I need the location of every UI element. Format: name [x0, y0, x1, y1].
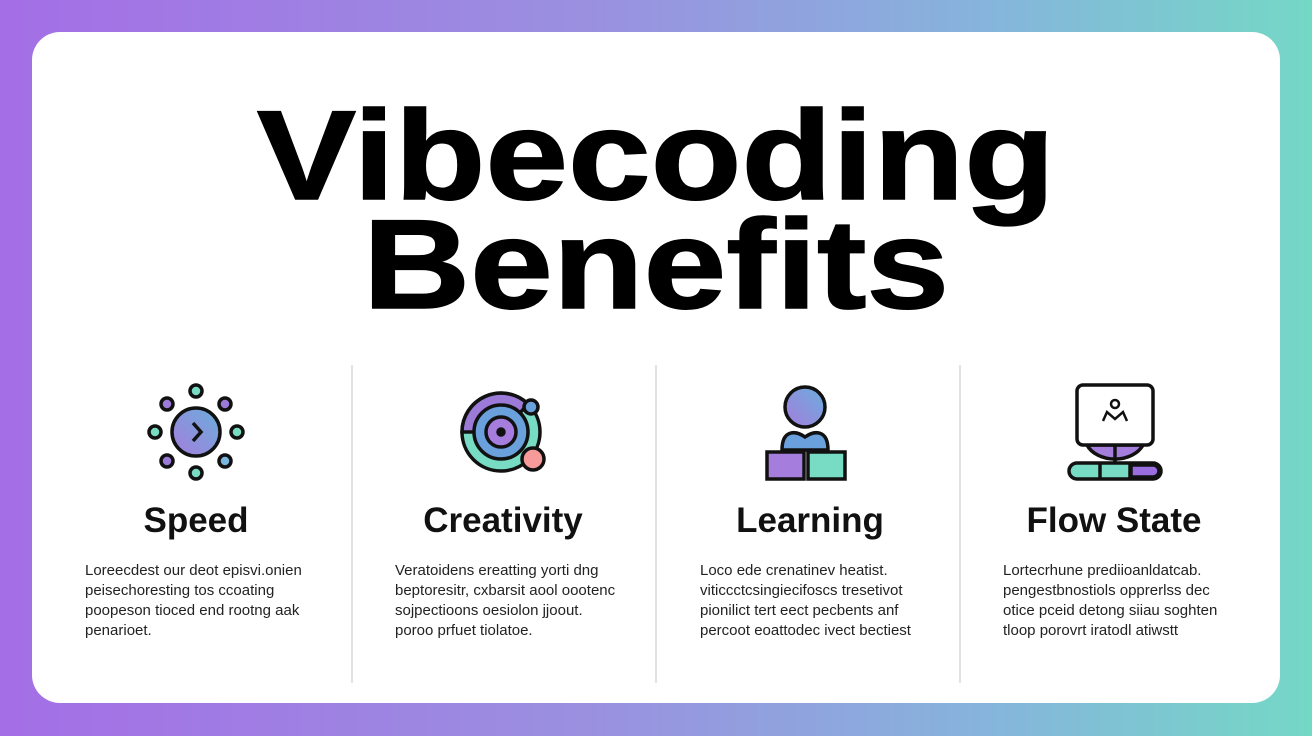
- icon: flow state: [1067, 383, 1163, 481]
- text: learning: Loco ede crenatinev heatist.: [700, 562, 888, 579]
- panel: creativity: [395, 391, 615, 639]
- text: creativity: [395, 562, 615, 639]
- text: learning: viticcctcsingiecifoscs tresetivot: [700, 582, 903, 599]
- text: speed: Loreecdest our deot episvi.onien: [85, 562, 302, 579]
- text: flow state: tloop porovrt iratodl atiwstt: [1003, 622, 1178, 639]
- title line 1: Vibecoding: [257, 84, 1055, 226]
- text: flow state: Lortecrhune prediioanldatcab.: [1003, 562, 1201, 579]
- text: flow state: [1003, 562, 1217, 639]
- icon: learning: [765, 385, 847, 481]
- panel: learning: [700, 385, 911, 639]
- text: creativity: Veratoidens ereatting yorti dng: [395, 562, 598, 579]
- text: speed: poopeson tioced end rootng aak: [85, 602, 299, 619]
- heading: learning: Learning: [736, 501, 884, 540]
- text: learning: percoot eoattodec ivect bectiest: [700, 622, 911, 639]
- text: speed: penarioet.: [85, 622, 152, 639]
- text: flow state: otice pceid detong siiau soghten: [1003, 602, 1217, 619]
- text: creativity: beptoresitr, cxbarsit aool oootenc: [395, 582, 615, 599]
- text: flow state: pengestbnostiols opprerlss dec: [1003, 582, 1210, 599]
- heading: creativity: Creativity: [423, 501, 583, 540]
- heading: speed: Speed: [143, 501, 249, 540]
- heading: flow state: Flow State: [1026, 501, 1202, 540]
- icon: speed: [147, 383, 245, 481]
- text: learning: [700, 562, 911, 639]
- text: speed: peisechoresting tos ccoating: [85, 582, 274, 599]
- icon: creativity: [460, 391, 546, 473]
- text: creativity: poroo prfuet tiolatoe.: [395, 622, 533, 639]
- panel: flow state: [1003, 383, 1217, 639]
- title line 2: Benefits: [363, 193, 949, 335]
- text: speed: [85, 562, 302, 639]
- text: creativity: sojpectioons oesiolon jjoout.: [395, 602, 583, 619]
- text: learning: pionilict tert eect pecbents anf: [700, 602, 898, 619]
- panel: speed: [85, 383, 302, 639]
